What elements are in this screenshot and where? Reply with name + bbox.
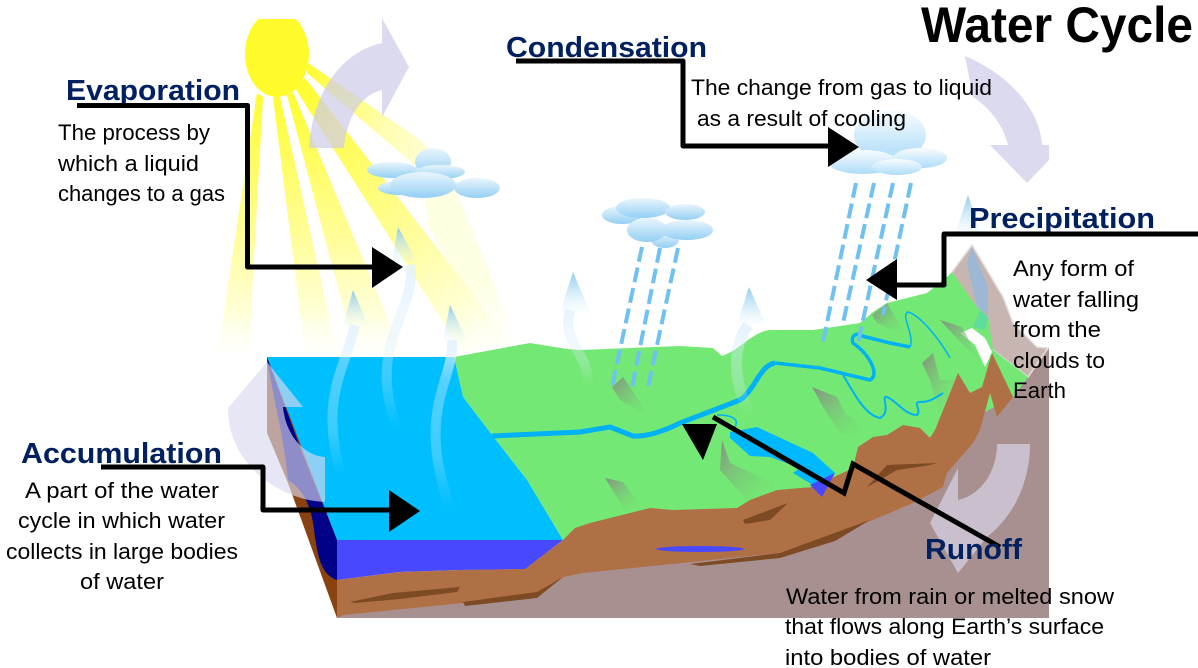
arrow: condensation flow <box>965 56 1049 183</box>
heading: accumulation: Accumulation <box>21 438 222 470</box>
tributary <box>717 415 736 427</box>
terrain shading <box>605 303 985 510</box>
glacier stream <box>967 247 988 315</box>
text: runoff definition: Water from rain or melted snow <box>786 584 1114 609</box>
arrow: evaporation flow <box>309 18 409 148</box>
sun rays <box>218 63 520 352</box>
left cliff <box>267 357 337 618</box>
text: accumulation definition: cycle in which water <box>18 508 225 533</box>
river headwater <box>906 312 950 358</box>
section: precipitation <box>866 203 1198 403</box>
arrow: accumulation flow <box>228 362 325 502</box>
upper river <box>775 334 910 380</box>
text: condensation definition: The change from gas to liquid <box>691 75 992 100</box>
arrow: runoff flow <box>930 444 1030 573</box>
arrow: condensation pointer <box>516 61 859 167</box>
text: runoff definition: that flows along Earth’s surface <box>785 614 1104 639</box>
text: precipitation definition: clouds to <box>1013 348 1105 373</box>
cloud: left <box>367 148 500 198</box>
deep water left edge <box>267 357 337 580</box>
text: evaporation definition: The process by <box>58 120 210 145</box>
text: evaporation definition: which a liquid <box>57 151 199 176</box>
section: evaporation <box>57 75 403 288</box>
heading: condensation: Condensation <box>506 32 707 64</box>
soil layer <box>337 353 1013 618</box>
snow <box>960 328 992 367</box>
cloud: centre <box>602 198 713 248</box>
lake outflow <box>810 473 835 497</box>
rising vapour arrows <box>332 195 980 507</box>
text: condensation definition: as a result of cooling <box>697 106 906 131</box>
bedrock <box>337 348 1049 618</box>
text: precipitation definition: Any form of <box>1013 256 1135 281</box>
section: runoff <box>682 417 1114 668</box>
text: accumulation definition: collects in large bodies <box>6 539 238 564</box>
main river <box>492 363 775 436</box>
text: precipitation definition: from the <box>1013 317 1101 342</box>
heading: runoff: Runoff <box>925 534 1022 566</box>
section: accumulation <box>6 438 420 594</box>
sun <box>245 11 309 97</box>
mountain <box>952 245 1048 377</box>
meltwater <box>973 310 988 330</box>
soil streaks <box>350 463 938 606</box>
arrow: evaporation pointer <box>77 106 403 288</box>
cloud: right <box>828 110 947 175</box>
deep water side <box>337 540 563 580</box>
text: accumulation definition: A part of the water <box>25 478 219 503</box>
river branch <box>843 375 943 418</box>
arrow: precipitation pointer <box>866 234 1198 300</box>
arrow: runoff pointer <box>682 417 1000 547</box>
heading: precipitation: Precipitation <box>969 203 1155 235</box>
rain: centre cloud <box>612 247 678 387</box>
underground pool <box>656 546 744 552</box>
text: precipitation definition: Earth <box>1013 378 1066 403</box>
land surface <box>454 272 1028 540</box>
rain: right cloud <box>822 183 911 347</box>
text: precipitation definition: water falling <box>1012 287 1139 312</box>
lake <box>730 427 835 485</box>
arrow: accumulation pointer <box>101 467 420 532</box>
landscape block <box>267 245 1049 618</box>
section: condensation <box>506 32 992 167</box>
text: evaporation definition: changes to a gas <box>58 181 225 206</box>
text: accumulation definition: of water <box>80 569 164 594</box>
heading: evaporation: Evaporation <box>66 75 240 107</box>
water surface <box>267 357 563 540</box>
